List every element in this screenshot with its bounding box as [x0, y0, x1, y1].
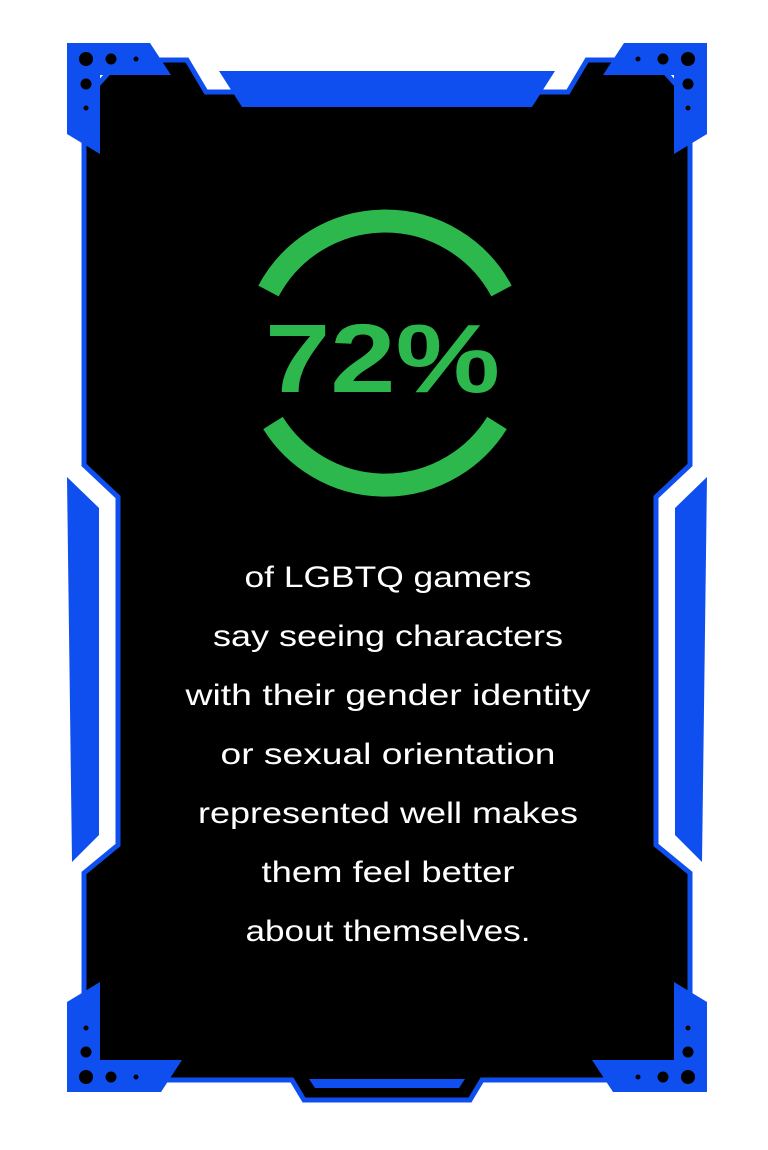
description text: represented well makes: [198, 797, 578, 830]
stat: 72%: 72%: [265, 304, 500, 413]
description text: about themselves.: [246, 915, 530, 948]
description text: or sexual orientation: [220, 738, 556, 771]
description text: of LGBTQ gamers: [244, 561, 532, 594]
ring gauge: [268, 221, 502, 485]
corner top-right: [603, 43, 707, 154]
description text: them feel better: [262, 856, 515, 889]
side bar right: [675, 477, 707, 862]
description text: with their gender identity: [184, 679, 590, 712]
right frame decorations: [592, 43, 707, 1092]
side bar left: [67, 477, 99, 862]
description text: [184, 561, 590, 948]
corner top-left: [67, 43, 171, 154]
top bar: [219, 71, 555, 107]
panel: black frame body: [84, 60, 690, 1100]
left frame decorations: [67, 43, 182, 1092]
bottom bar: [309, 1079, 465, 1088]
description text: say seeing characters: [213, 620, 563, 653]
corner bottom-right: [592, 982, 707, 1092]
corner bottom-left: [67, 982, 182, 1092]
